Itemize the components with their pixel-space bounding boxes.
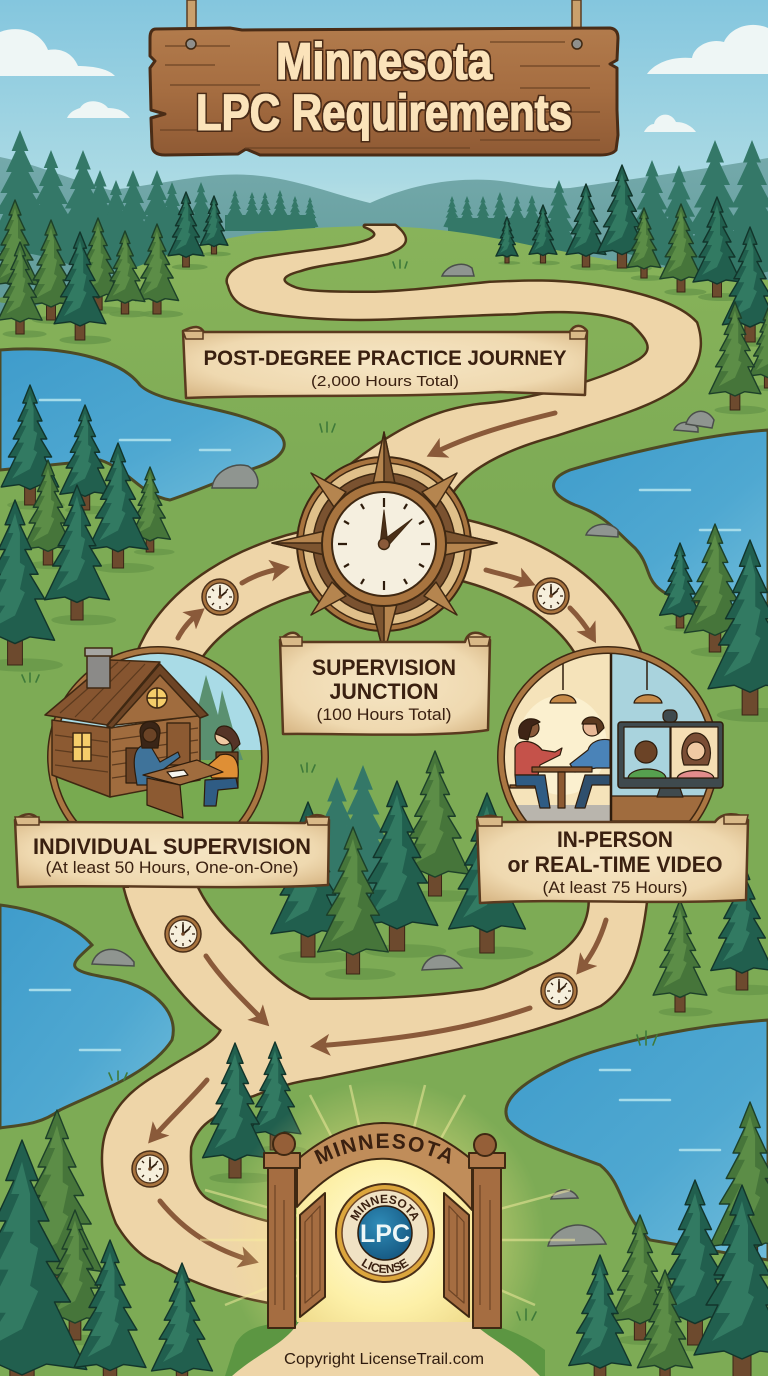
lawn under gate	[225, 1320, 545, 1376]
trees: bottom left	[0, 1110, 219, 1376]
banner: supervision junction: JUNCTION	[330, 679, 438, 704]
small clock: left lower	[165, 916, 201, 952]
direction arrows	[152, 413, 606, 1261]
trees: upper left forest	[0, 192, 231, 344]
small clock: trail end	[132, 1151, 168, 1187]
LPC license medallion	[335, 1183, 435, 1283]
video call monitor	[618, 710, 723, 797]
counselor and client at desk	[126, 722, 240, 818]
lake: lower right	[506, 1020, 768, 1260]
cabin vignette	[44, 646, 269, 822]
hybrid supervision vignette	[497, 646, 724, 821]
arch lettering: MINNESOTA	[314, 1134, 451, 1164]
trees: upper right forest	[496, 165, 768, 414]
winding trail	[103, 226, 700, 1302]
banner: supervision junction: (100 Hours Total)	[316, 705, 452, 724]
log cabin	[45, 648, 208, 797]
distant hills	[0, 157, 768, 320]
trees: left middle	[0, 385, 175, 672]
banner: supervision junction	[280, 633, 490, 735]
banner: individual supervision	[15, 814, 329, 887]
light rays	[200, 1085, 575, 1305]
banner: in-person or real-time video	[477, 814, 748, 903]
trees: lower right	[653, 860, 768, 1016]
gate	[263, 1122, 506, 1329]
glow behind gate	[225, 1080, 545, 1376]
hanging ropes	[187, 0, 581, 28]
sky	[0, 0, 768, 300]
grass tufts	[22, 260, 657, 1320]
trees: right middle	[660, 524, 768, 722]
banner: supervision junction: SUPERVISION	[312, 655, 456, 680]
title sign	[150, 28, 618, 155]
small clock: right lower	[541, 973, 577, 1009]
trees: bottom right	[569, 1102, 768, 1376]
trees: central grove	[271, 751, 533, 980]
lake: lower left	[0, 905, 173, 1128]
banner: individual supervision: INDIVIDUAL SUPERVISION	[33, 834, 311, 859]
small clock: left upper	[202, 579, 238, 615]
LPC license medallion: LICENSE	[361, 1258, 409, 1274]
trees: near gate	[203, 1042, 306, 1183]
title sign: LPC Requirements	[196, 84, 572, 141]
banner: post-degree practice journey	[183, 326, 587, 398]
lake: upper right	[554, 430, 768, 610]
title sign: Minnesota	[276, 33, 493, 91]
LPC license medallion: LPC	[360, 1220, 410, 1248]
distant tree line	[225, 190, 548, 248]
lake: upper left	[0, 349, 284, 500]
banner: post-degree practice journey: (2,000 Hours Total)	[311, 373, 459, 390]
banner: post-degree practice journey: POST-DEGREE PRACTICE JOURNEY	[204, 347, 566, 370]
banner: in-person or real-time video: (At least 75 Hours)	[542, 878, 688, 897]
rocks	[92, 264, 714, 1246]
banner: in-person or real-time video: IN-PERSON	[557, 827, 673, 852]
copyright: Copyright LicenseTrail.com	[284, 1351, 484, 1368]
banner: in-person or real-time video: or REAL-TIME VIDEO	[508, 852, 722, 877]
LPC license medallion: MINNESOTA	[350, 1194, 418, 1222]
banner: individual supervision: (At least 50 Hours, One-on-One)	[46, 858, 298, 877]
clouds	[0, 25, 768, 132]
near meadow	[0, 226, 768, 500]
water ripples	[30, 400, 740, 1150]
compass clock: supervision junction	[272, 432, 497, 654]
sandy path to gate	[232, 1320, 540, 1376]
trees: far back rows	[0, 130, 768, 275]
small clock: right upper	[533, 578, 569, 614]
